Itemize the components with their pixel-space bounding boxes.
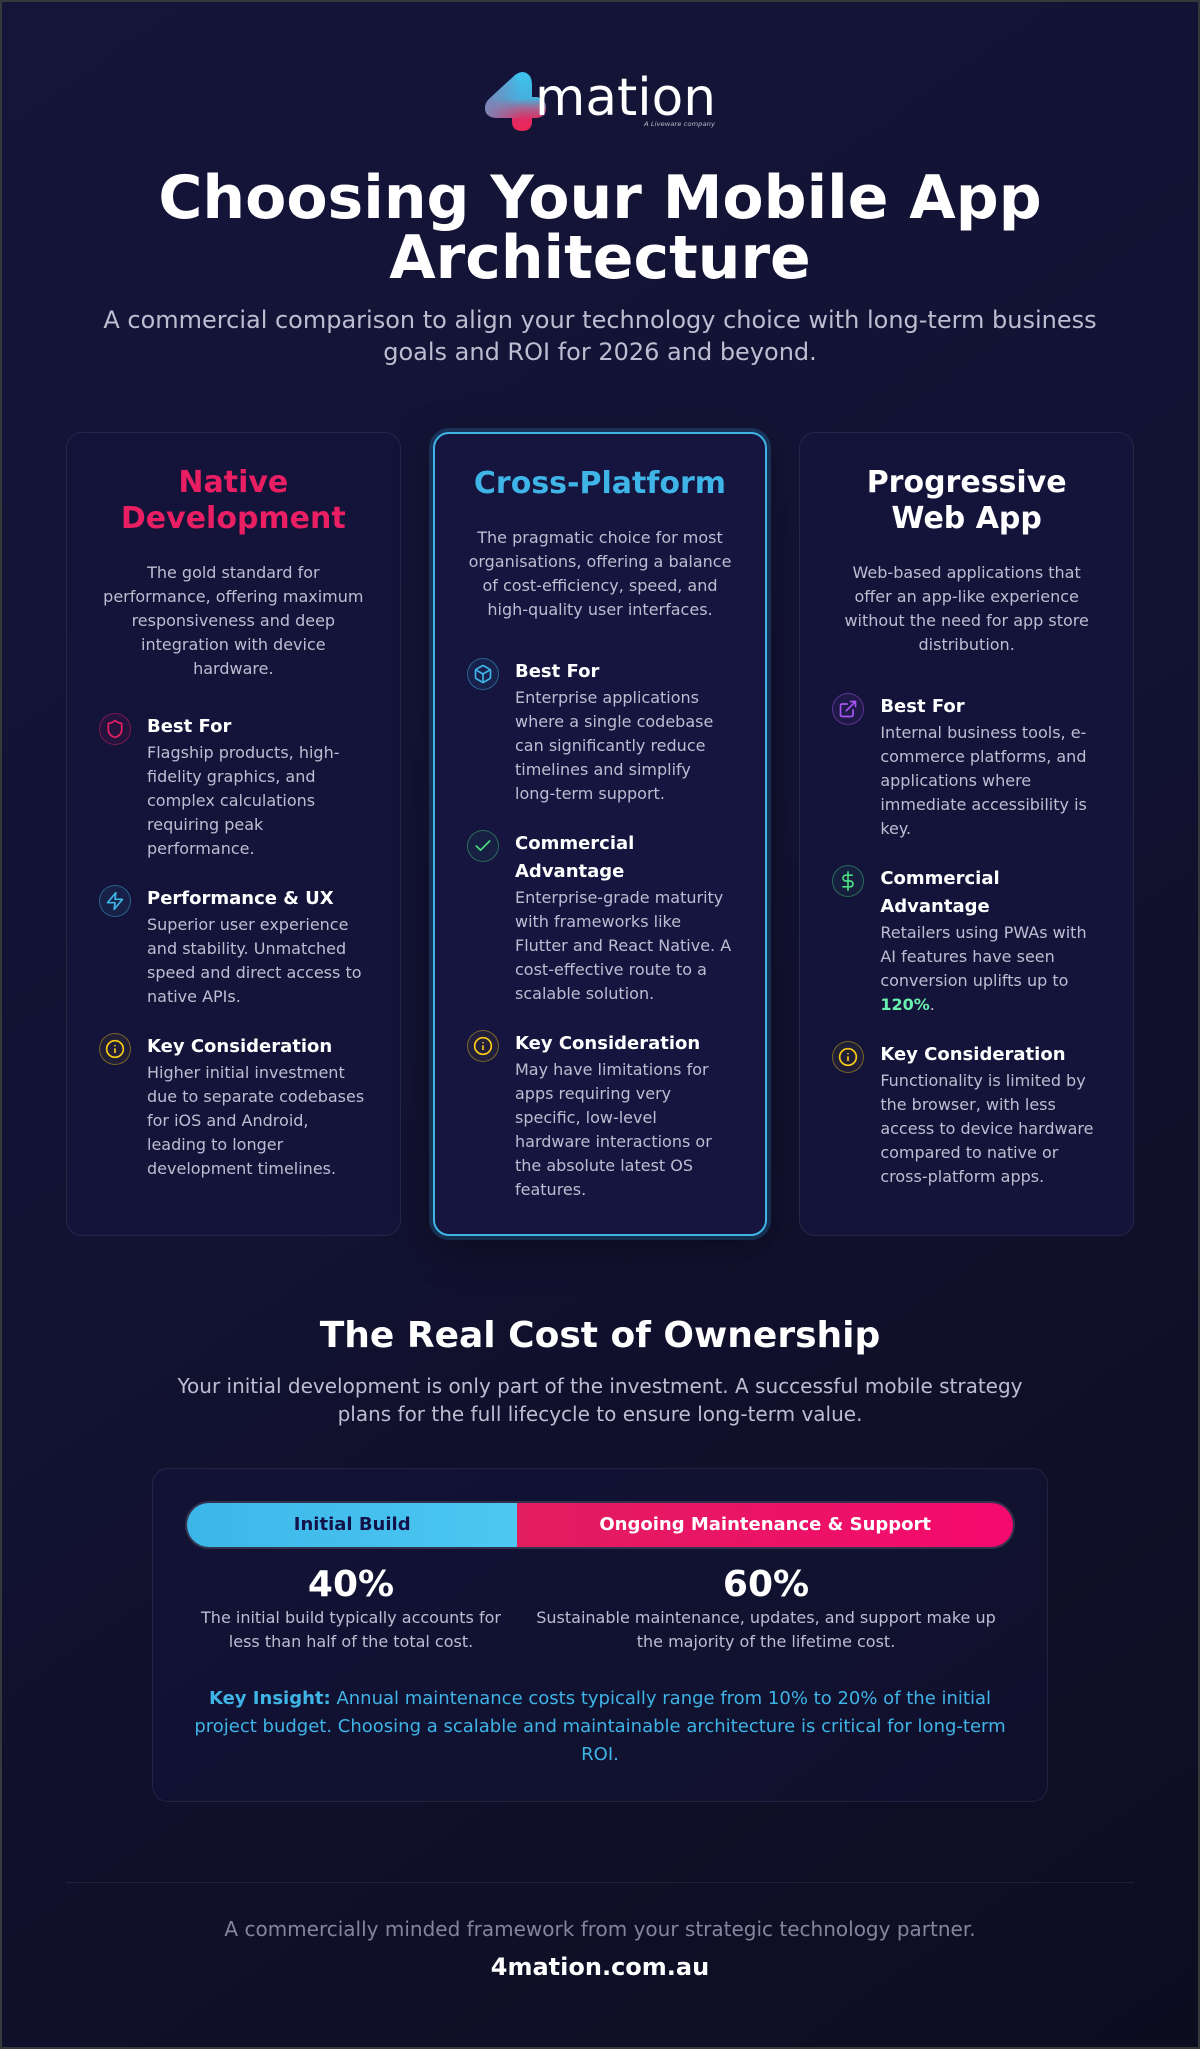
item: key consideration: Key Consideration [515, 1033, 700, 1054]
item: key consideration: May have limitations for apps requiring very specific, low-level hardware interactions or the absolute latest OS features. [515, 1060, 712, 1199]
stat: 40%: The initial build typically accounts for less than half of the total cost. [201, 1608, 501, 1651]
segment: initial build: Initial Build [294, 1514, 411, 1535]
heading: native: Native Development [121, 465, 346, 536]
item: best for: Enterprise applications where a single codebase can significantly reduce timelines and simplify long-term support. [515, 688, 713, 803]
item: commercial advantage [832, 865, 1087, 1014]
heading: cost of ownership: The Real Cost of Ownership [320, 1315, 880, 1356]
item: commercial advantage [467, 830, 731, 1003]
stat: 60%: 60% [723, 1564, 809, 1605]
icon: zap [99, 885, 131, 917]
item: best for: Internal business tools, e-commerce platforms, and applications where immediate accessibility is key. [880, 723, 1087, 838]
icon: external link [832, 693, 864, 725]
item: key consideration: Higher initial investment due to separate codebases for iOS and Android, leading to longer development timelines. [147, 1063, 364, 1178]
item: best for: Best For [515, 661, 599, 682]
item: best for: Best For [147, 716, 231, 737]
segment: ongoing maintenance [517, 1503, 1013, 1547]
stat: 40% [200, 1564, 501, 1651]
subtitle: goals and ROI for 2026 and beyond. [383, 338, 817, 366]
icon: info [99, 1033, 131, 1065]
panel: cost breakdown [152, 1468, 1048, 1802]
logo: mation [535, 68, 716, 128]
stacked bar [185, 1501, 1015, 1549]
cross-platform description: The pragmatic choice for most organisations, offering a balance of cost-efficiency, speed, and high-quality user interfaces. [469, 528, 731, 619]
item: key consideration [832, 1041, 1093, 1186]
title [158, 163, 1042, 293]
heading: pwa: Progressive Web App [867, 465, 1067, 536]
item: performance [99, 885, 362, 1006]
item: key consideration: Functionality is limited by the browser, with less access to device hardware compared to native or cross-platform apps. [880, 1071, 1093, 1186]
segment: initial build [187, 1503, 517, 1547]
item: best for [467, 658, 713, 803]
stat: 60%: Sustainable maintenance, updates, and support make up the majority of the lifetime cost. [536, 1608, 996, 1651]
icon: shield [99, 713, 131, 745]
item: key consideration [467, 1030, 712, 1199]
item: key consideration: Key Consideration [880, 1044, 1066, 1065]
segment: ongoing maintenance: Ongoing Maintenance & Support [599, 1514, 931, 1535]
panel: cross-platform [433, 432, 767, 1236]
item: commercial advantage: Commercial Advantage [880, 868, 1000, 917]
native description: The gold standard for performance, offering maximum responsiveness and deep integration with device hardware. [103, 563, 363, 678]
item: commercial advantage: Commercial Advantage [515, 833, 634, 882]
item: commercial advantage: Enterprise-grade maturity with frameworks like Flutter and React Native. A cost-effective route to a scalable solution. [515, 888, 731, 1003]
subtitle: A commercial comparison to align your technology choice with long-term business [103, 306, 1097, 334]
heading: cross-platform: Cross-Platform [474, 466, 726, 501]
panel: native development [66, 432, 401, 1236]
key insight: Key Insight: Annual maintenance costs typically range from 10% to 20% of the initial project budget. Choosing a scalable and maintainable architecture is critical for long-term ROI. [194, 1688, 1006, 1765]
icon: dollar [832, 865, 864, 897]
icon: info [467, 1030, 499, 1062]
logo: A Liveware company [643, 120, 715, 128]
item: key consideration [99, 1033, 364, 1178]
title: Architecture [389, 223, 811, 293]
subtitle [103, 306, 1097, 366]
item: commercial advantage: Retailers using PWAs with AI features have seen conversion uplifts up to 120%. [880, 923, 1087, 1014]
footer tagline: A commercially minded framework from your strategic technology partner. [224, 1917, 976, 1941]
item: key consideration: Key Consideration [147, 1036, 332, 1057]
item: best for [99, 713, 339, 858]
icon: check [467, 830, 499, 862]
cost intro text: plans for the full lifecycle to ensure long-term value. [338, 1402, 862, 1426]
cost intro text [177, 1374, 1023, 1426]
stat: 60% [536, 1564, 996, 1651]
item: performance: Superior user experience and stability. Unmatched speed and direct access to native APIs. [147, 915, 362, 1006]
title: Choosing Your Mobile App [158, 163, 1042, 233]
panel: progressive web app [799, 432, 1134, 1236]
footer url: 4mation.com.au [491, 1953, 709, 1981]
pwa description: Web-based applications that offer an app-like experience without the need for app store distribution. [844, 563, 1089, 654]
item: best for [832, 693, 1087, 838]
cost intro text: Your initial development is only part of the investment. A successful mobile strategy [177, 1374, 1023, 1398]
item: best for: Best For [880, 696, 965, 717]
icon: box [467, 658, 499, 690]
item: performance: Performance & UX [147, 888, 334, 909]
stat: 40%: 40% [308, 1564, 394, 1605]
icon: info [832, 1041, 864, 1073]
item: best for: Flagship products, high-fidelity graphics, and complex calculations requiring peak performance. [147, 743, 339, 858]
